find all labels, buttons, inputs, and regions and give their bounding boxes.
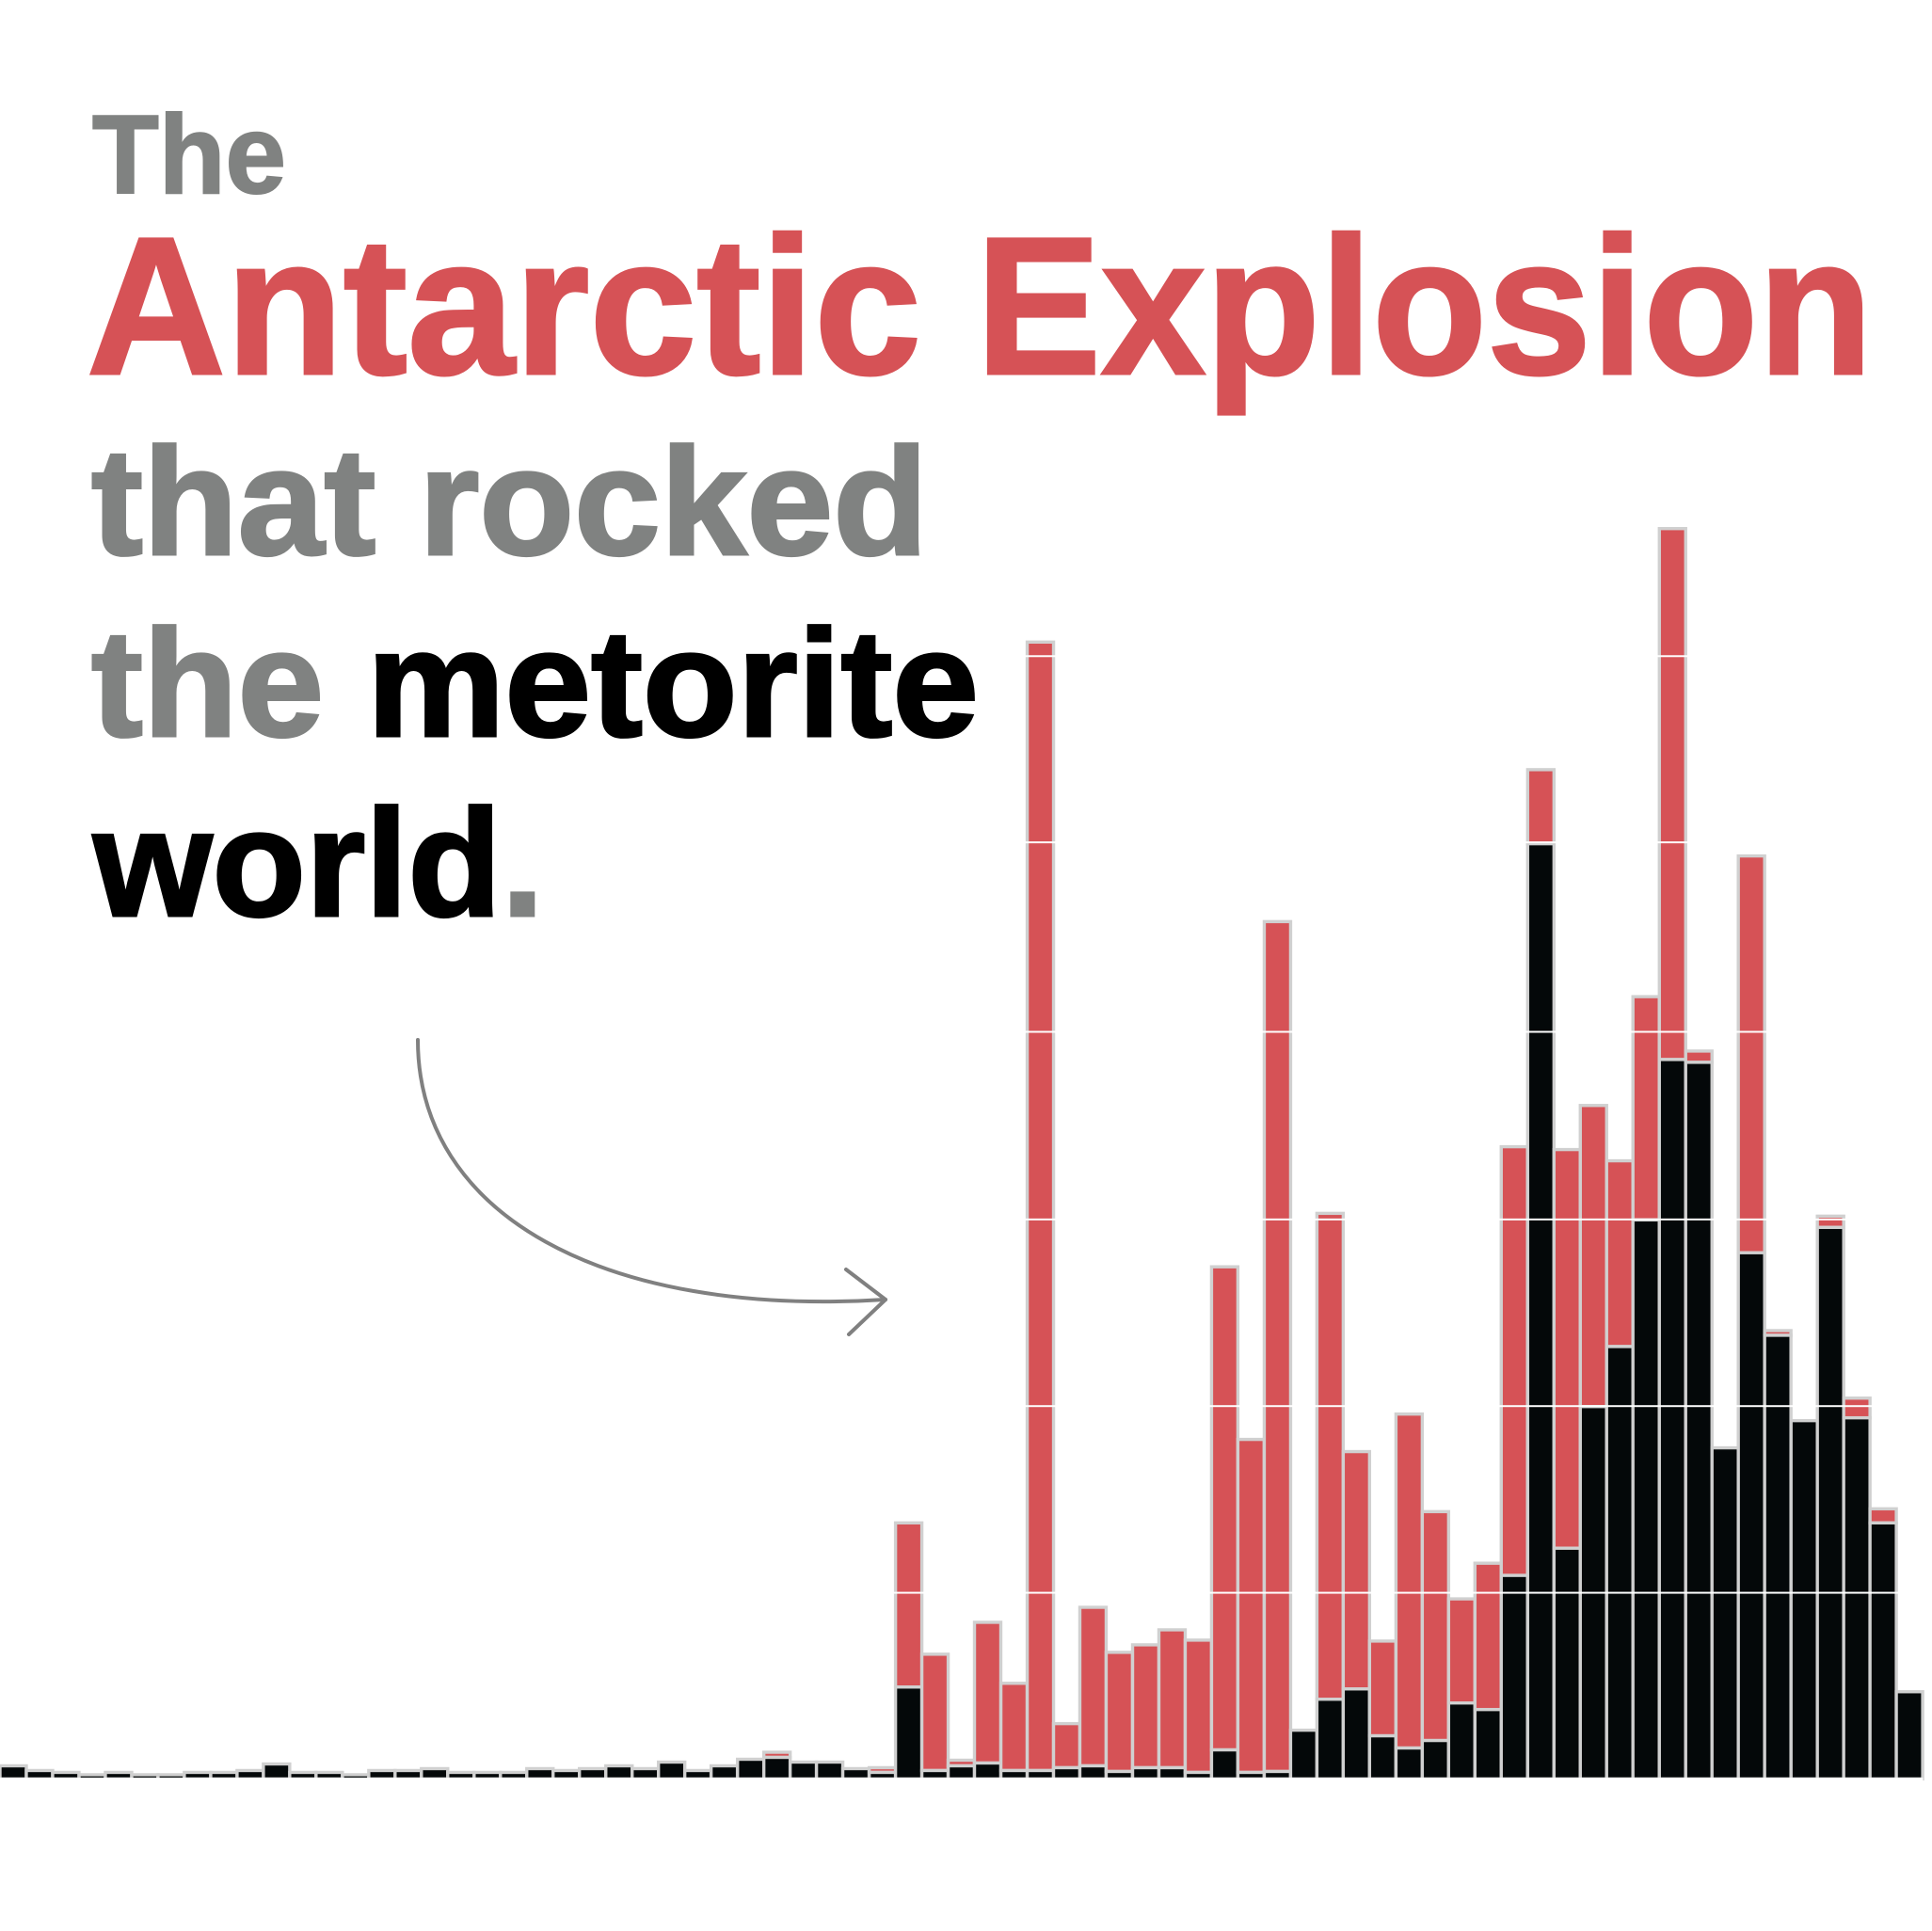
- title line: The: The: [92, 92, 286, 217]
- stacked bar chart: [0, 529, 1923, 1806]
- title line: Antarctic Explosion: [87, 198, 1873, 416]
- title line: Antarctic Explosion: Antarctic: [87, 198, 921, 416]
- title line: Antarctic Explosion: Explosion: [976, 198, 1873, 416]
- bars: Antarctic explosion, red over black: [896, 529, 1923, 1779]
- title line: the metorite: the metorite: [91, 598, 979, 769]
- title line: world.: world.: [92, 778, 544, 949]
- bars: early years, almost all black: [0, 1752, 896, 1779]
- arrow: [418, 1040, 886, 1334]
- title line: that rocked: that rocked: [91, 417, 928, 587]
- title: [87, 92, 1873, 949]
